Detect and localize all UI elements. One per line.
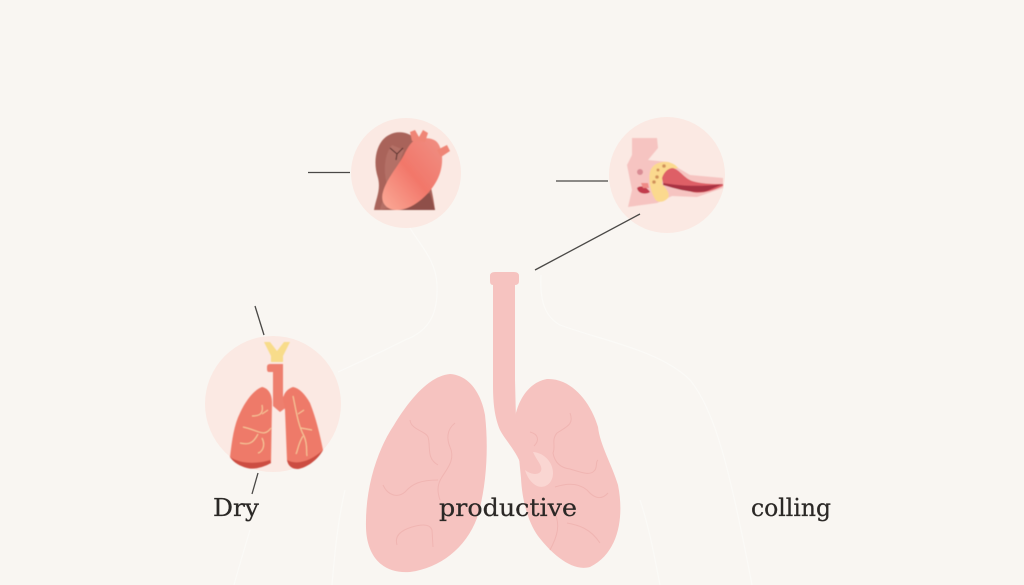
icon: throat and reflux	[627, 138, 723, 207]
right lung	[515, 379, 620, 568]
right lung veins	[530, 413, 608, 550]
left lung	[366, 374, 487, 572]
icon: small lungs	[230, 342, 323, 469]
panel: digestive circle	[609, 117, 725, 233]
bronchus hook	[525, 452, 553, 487]
panel: heart circle	[351, 118, 461, 228]
faint body silhouette	[234, 228, 752, 585]
panel: lungs circle	[205, 336, 341, 472]
trachea	[490, 272, 538, 475]
label: productive: productive	[439, 494, 577, 522]
icon: heart	[374, 130, 450, 210]
label: colling: colling	[751, 494, 831, 522]
callout lines	[252, 172, 640, 494]
central lungs illustration	[366, 272, 620, 572]
label: Dry: Dry	[213, 494, 259, 522]
left lung veins	[383, 420, 455, 547]
